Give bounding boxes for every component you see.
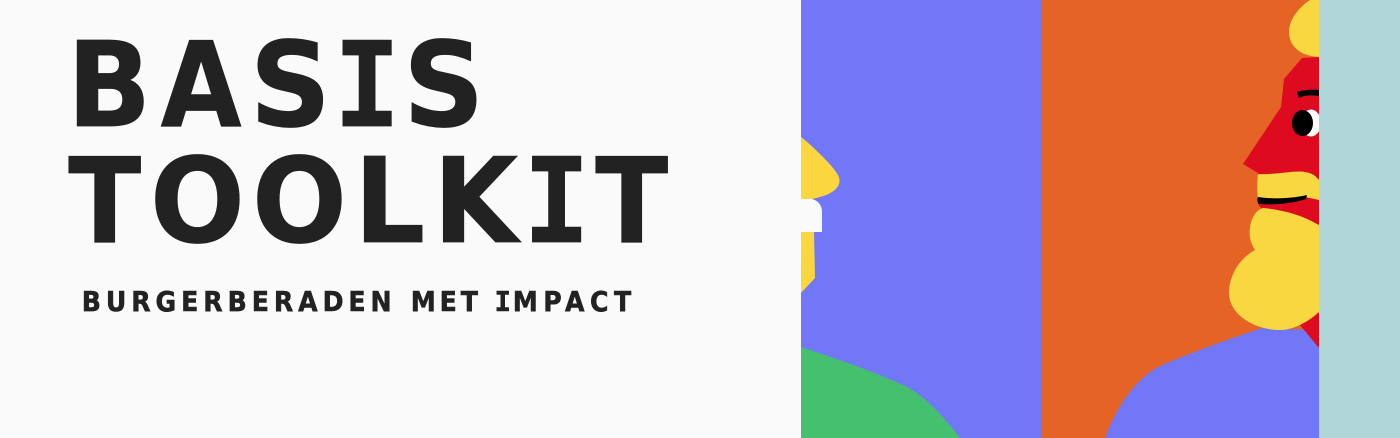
- title: O: [252, 134, 347, 271]
- title: O: [150, 134, 245, 271]
- panel: purple background: [801, 0, 1042, 438]
- title: S: [250, 18, 331, 155]
- title: T: [595, 134, 669, 270]
- title: T: [68, 134, 142, 270]
- title: B: [67, 17, 151, 154]
- figure: left person: [801, 137, 960, 438]
- subtitle: MPACT: [513, 287, 637, 318]
- title: S: [403, 18, 484, 155]
- illustration panel: [801, 0, 1400, 438]
- figure: right person: [1105, 0, 1321, 438]
- subtitle: I: [494, 287, 511, 318]
- subtitle: [82, 287, 637, 318]
- title: I: [523, 134, 590, 271]
- subtitle: MET: [411, 287, 482, 318]
- panel: teal strip: [1319, 0, 1400, 438]
- title: K: [433, 133, 522, 270]
- title: A: [161, 18, 242, 155]
- panel: orange background: [1042, 0, 1319, 438]
- title: L: [354, 134, 425, 271]
- title: [67, 17, 669, 271]
- title: I: [334, 18, 401, 155]
- subtitle: BURGERBERADEN: [82, 287, 397, 318]
